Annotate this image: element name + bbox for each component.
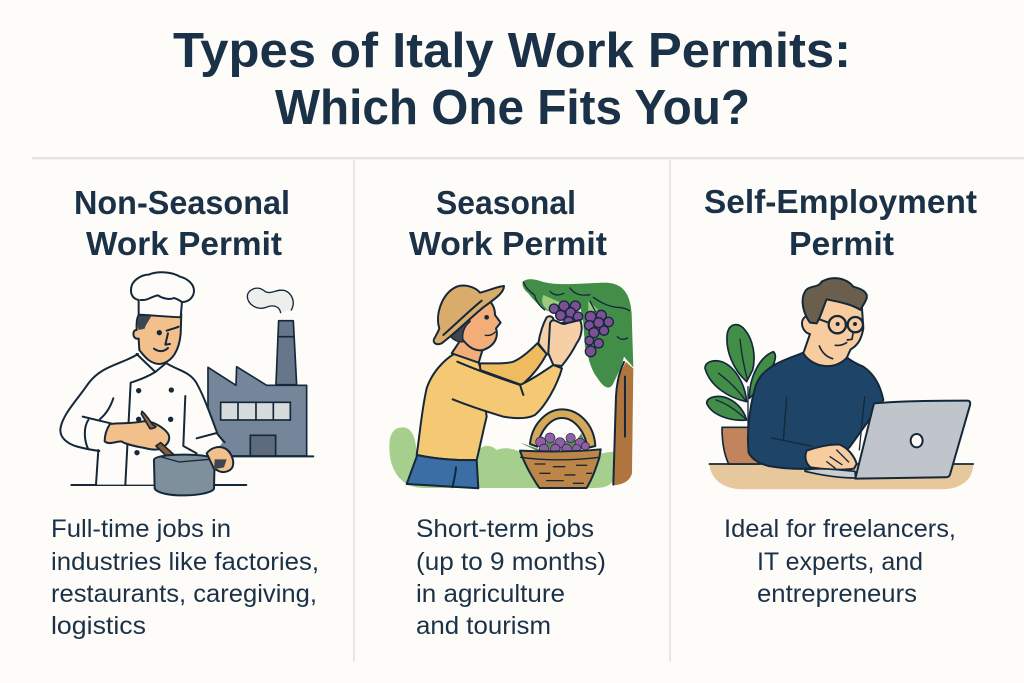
text block: Non-Seasonal description: logistics [51,612,146,640]
title: Types of Italy Work Permits: [173,24,851,78]
heading: Seasonal Work Permit [409,184,607,262]
title [173,24,851,135]
text block: Seasonal description: and tourism [416,612,551,640]
text block: Self-Employment description: entrepreneurs [757,580,917,608]
icon: laptop [805,401,970,479]
title: Which One Fits You? [275,81,750,135]
heading: Seasonal Work Permit: Seasonal [436,184,576,221]
text block: Self-Employment description [724,515,956,608]
text block: Seasonal description: in agriculture [416,580,565,608]
heading: Self-Employment Permit: Permit [789,225,894,262]
icon: tree trunk [613,362,633,485]
heading: Non-Seasonal Work Permit: Non-Seasonal [74,184,290,221]
background bushes [389,427,613,488]
heading: Seasonal Work Permit: Work Permit [409,225,607,262]
text block: Non-Seasonal description [51,515,319,640]
heading: Non-Seasonal Work Permit: Work Permit [86,225,282,262]
text block: Non-Seasonal description: industries like factories, [51,548,319,576]
icon: factory [208,288,313,456]
icon: farmer [407,286,582,488]
text block: Seasonal description [416,515,606,640]
illustration: grape picker [389,279,633,488]
text block: Non-Seasonal description: Full-time jobs in [51,515,231,543]
text block: Self-Employment description: Ideal for freelancers, [724,515,956,543]
text block: Seasonal description: Short-term jobs [416,515,594,543]
illustration: freelancer at laptop [705,278,973,489]
text block: Non-Seasonal description: restaurants, caregiving, [51,580,317,608]
icon: basket [520,409,601,488]
text block: Seasonal description: (up to 9 months) [416,548,606,576]
icon: chef [60,272,246,495]
heading: Self-Employment Permit [704,183,977,262]
icon: grapes [549,301,613,357]
illustration: chef and factory [60,272,313,495]
text block: Self-Employment description: IT experts, and [757,548,923,576]
heading: Non-Seasonal Work Permit [74,184,290,262]
icon: vine leaves [522,279,633,388]
desk [709,464,973,489]
icon: man [748,278,883,470]
heading: Self-Employment Permit: Self-Employment [704,183,977,220]
icon: plant [705,325,775,464]
